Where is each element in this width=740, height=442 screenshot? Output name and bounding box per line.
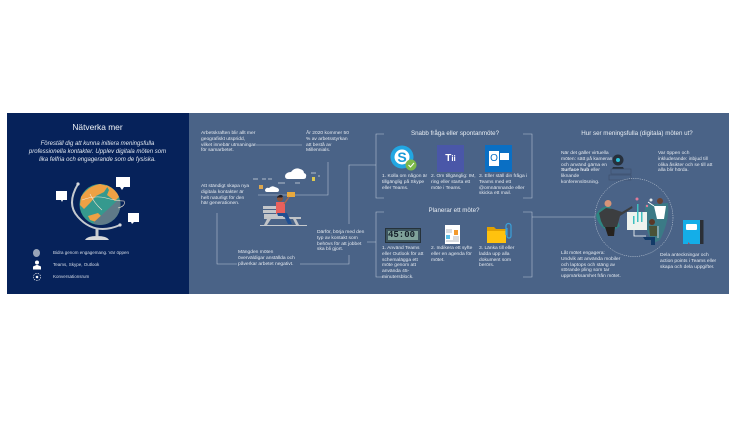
text: start with contact type bbox=[317, 230, 364, 252]
panel: right content bbox=[189, 113, 729, 294]
icon: webcam bbox=[608, 154, 632, 180]
text: step 3 question: skicka ett mail. bbox=[479, 191, 511, 196]
text: start with contact type: typ av kontakt som bbox=[317, 236, 358, 241]
text: be open bbox=[658, 150, 712, 173]
text: step 3 question: @omnämnande eller bbox=[479, 186, 524, 191]
text: be open: Var öppen och bbox=[658, 151, 689, 156]
text: step 2 agenda bbox=[431, 246, 472, 263]
icon: timer clock: 45:00 bbox=[388, 230, 415, 240]
text: step 3 documents: ladda upp alla bbox=[479, 252, 509, 257]
text: too many meetings: påverkar arbetet negativt. bbox=[238, 262, 293, 267]
list text: tools: Teams, Skype, Outlook bbox=[53, 262, 99, 267]
text: digital contacts: här generationen. bbox=[201, 201, 239, 206]
text: workforce bbox=[201, 130, 256, 153]
text: digital contacts: digitala kontakter är bbox=[201, 190, 244, 195]
text: step 2 IM: ring eller starta ett bbox=[431, 180, 470, 185]
heading: planning: Planerar ett möte? bbox=[429, 207, 479, 214]
text: step 2 IM: 2. Om tillgänglig: IM, bbox=[431, 174, 476, 179]
text: workforce: geografiskt utspridd, bbox=[201, 137, 245, 142]
text: step 3 documents bbox=[479, 246, 514, 268]
intro text: professionella kontakter. Upplev digitala möten som bbox=[29, 149, 166, 155]
text: workforce: vilket innebär utmaningar bbox=[201, 143, 256, 148]
text: step 3 documents: 3. Länka till eller bbox=[479, 246, 514, 251]
text: be open: inkluderande: inbjud till bbox=[658, 157, 708, 162]
list text: engagement: Bidra genom engagemang. Var öppen bbox=[53, 250, 129, 255]
text: workforce: för samarbetet. bbox=[201, 148, 234, 153]
icon: engagement globe bbox=[33, 249, 40, 257]
text: too many meetings bbox=[238, 250, 295, 267]
text: step 3 documents: berörs. bbox=[479, 263, 494, 268]
icon: Outlook bbox=[485, 145, 512, 172]
text: 2020: att bestå av bbox=[306, 143, 331, 148]
text: be open: olika åsikter och se till att bbox=[658, 163, 712, 168]
icon: Outlook: O bbox=[490, 153, 498, 164]
text: start with contact type: ska bli gjort. bbox=[317, 247, 343, 252]
heading: meaningful meetings: Hur ser meningsfulla (digitala) möten ut? bbox=[581, 130, 693, 137]
heading: quick question: Snabb fråga eller spontanmöte? bbox=[411, 130, 499, 137]
text: engaged meetings: störande pling som tar bbox=[561, 268, 609, 273]
title: Nätverka mer bbox=[72, 122, 123, 132]
text: 2020: % av arbetsstyrkan bbox=[306, 137, 348, 142]
icon: Skype bbox=[390, 146, 416, 170]
text: share notes: Dela anteckningar och bbox=[660, 253, 709, 258]
text: camera: liknande bbox=[561, 174, 579, 179]
text: step 1 schedule: möte genom att bbox=[382, 263, 416, 268]
text: camera: konferenslösning. bbox=[561, 180, 599, 185]
text: camera bbox=[561, 150, 612, 185]
text: camera: möten: sätt på kameran bbox=[561, 157, 612, 162]
icon: people bbox=[33, 260, 41, 270]
text: engaged meetings: uppmärksamhet från mötet. bbox=[561, 274, 621, 279]
text: step 3 question: Teams med ett bbox=[479, 180, 511, 185]
text: engaged meetings bbox=[561, 250, 621, 279]
text: start with contact type: behövs för att jobbet bbox=[317, 242, 361, 247]
text: 2020: År 2020 kommer 50 bbox=[306, 131, 349, 136]
text: step 1 schedule: 1. Använd Teams bbox=[382, 246, 419, 251]
icon: agenda document bbox=[445, 225, 460, 244]
text: be open: alla blir hörda. bbox=[658, 168, 689, 173]
text: step 1 schedule: använda 45- bbox=[382, 269, 409, 274]
text: engaged meetings: Undvik att använda mobiler bbox=[561, 257, 620, 262]
text: step 3 question: 3. Eller ställ din fråga i bbox=[479, 174, 527, 179]
text: step 2 IM: möte i Teams. bbox=[431, 186, 461, 191]
text: share notes bbox=[660, 252, 716, 270]
list text: forum: Konversationsrum bbox=[53, 274, 89, 279]
intro text: lika felfria och engagerande som de fysiska. bbox=[39, 157, 156, 163]
icon: notebook bbox=[683, 220, 704, 244]
icon: Teams bbox=[437, 145, 464, 172]
icon: folder with paperclip bbox=[487, 222, 512, 243]
text: too many meetings: överväldigar anställda och bbox=[238, 256, 295, 261]
text: step 3 question bbox=[479, 173, 527, 196]
text: step 2 agenda: eller en agenda för bbox=[431, 252, 472, 257]
illustration: globe with speech bubbles bbox=[56, 177, 139, 240]
text: step 1 Skype: 1. Kolla om någon är bbox=[382, 174, 427, 179]
icon: Teams: Tii bbox=[445, 153, 456, 164]
text: start with contact type: Därför, börja med den bbox=[317, 230, 364, 235]
text: digital contacts: helt naturligt för den bbox=[201, 196, 244, 201]
icon: conversation forum bbox=[33, 273, 41, 281]
text: step 1 Skype: eller Teams. bbox=[382, 186, 408, 191]
text: share notes: action points i Teams eller bbox=[660, 259, 716, 264]
text: step 1 Skype: tillgänglig på Skype bbox=[382, 180, 424, 185]
illustration: meeting circle with people bbox=[594, 178, 674, 257]
intro text: Föreställ dig att kunna initiera meningsfulla bbox=[41, 141, 154, 147]
text: too many meetings: Mängden möten bbox=[238, 250, 273, 255]
text: step 3 documents: dokument som bbox=[479, 258, 511, 263]
text: 2020: Millennials. bbox=[306, 148, 330, 153]
text: camera: Surface hub eller bbox=[561, 168, 600, 173]
text: step 1 schedule bbox=[382, 246, 424, 280]
text: engaged meetings: och laptops och stäng av bbox=[561, 263, 615, 268]
intro text bbox=[28, 140, 166, 163]
text: workforce: Arbetskraften blir allt mer bbox=[201, 131, 255, 136]
text: step 1 schedule: eller Outlook för att bbox=[382, 252, 423, 257]
icon: timer clock bbox=[385, 228, 421, 243]
icon: Skype: S bbox=[397, 149, 407, 165]
text: digital contacts bbox=[201, 184, 250, 206]
text: camera: När det gäller virtuella bbox=[561, 151, 609, 156]
text: engaged meetings: Låt mötet engagera: bbox=[561, 251, 605, 256]
text: 2020 bbox=[306, 130, 349, 153]
text: digital contacts: Att ständigt skapa nya bbox=[201, 184, 249, 189]
text: share notes: skapa och dela uppgifter. bbox=[660, 265, 714, 270]
text: step 1 schedule: minutersblock. bbox=[382, 275, 414, 280]
text: step 2 agenda: 2. Indikera ett syfte bbox=[431, 246, 472, 251]
panel: left intro bbox=[7, 113, 189, 294]
text: step 2 IM bbox=[431, 174, 476, 191]
text: camera: och använd gärna en bbox=[561, 163, 607, 168]
text: step 1 Skype bbox=[382, 173, 428, 191]
illustration: person on bench with clouds bbox=[253, 168, 320, 226]
text: step 1 schedule: schemalägga ett bbox=[382, 258, 418, 263]
text: step 2 agenda: mötet. bbox=[431, 258, 445, 263]
